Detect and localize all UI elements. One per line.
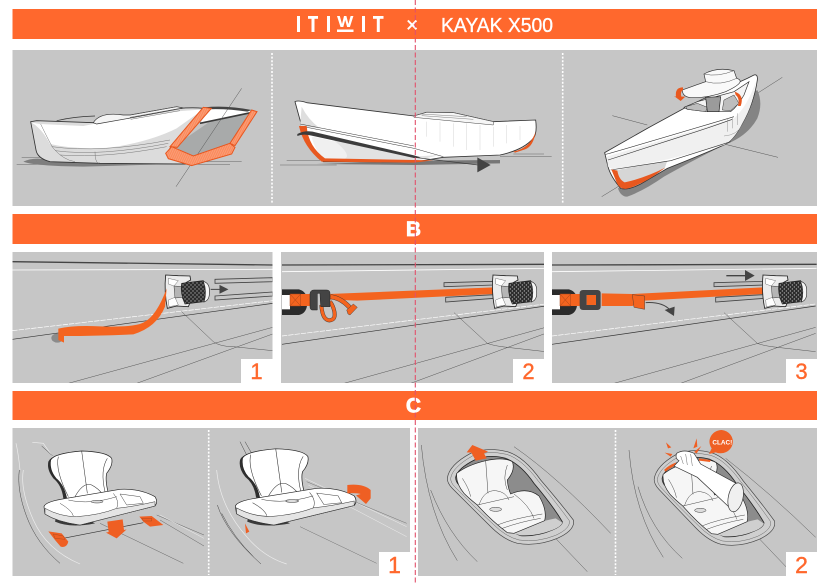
arrow up [467, 445, 488, 461]
seat installed with rotate arrow [217, 442, 407, 564]
step number 1: 1 [250, 359, 263, 384]
arrow [211, 286, 227, 293]
rotation arrows [674, 87, 685, 101]
band C [12, 391, 817, 420]
step number 1 [379, 552, 410, 578]
kayak with orange hatch frame [17, 88, 257, 187]
strap tail [331, 297, 351, 309]
arrow down [106, 519, 127, 538]
impact marks [665, 438, 701, 457]
strap loop [321, 302, 335, 320]
panel: C step 2 [418, 428, 817, 578]
header band [12, 9, 817, 39]
kayak with strap and arrow [280, 101, 552, 172]
panel: B step 1 [12, 252, 273, 384]
title: KAYAK X500: KAYAK X500 [441, 14, 553, 37]
kayak seen from front with rotation arrows [602, 69, 782, 197]
rails [215, 278, 273, 300]
logo: ITIWIT [297, 16, 384, 32]
step number 3: 3 [795, 359, 808, 384]
forearm and hand [674, 451, 742, 512]
rotate arrow [347, 485, 371, 504]
seat with clips [16, 442, 204, 564]
letter C: C [406, 394, 421, 418]
letter B: B [406, 218, 421, 241]
speech bubble: CLAC! [709, 430, 733, 454]
speech bubble: CLAC!: CLAC! [712, 440, 732, 446]
step number 3 [786, 359, 817, 384]
step number 2: 2 [522, 359, 535, 384]
panel: B step 3 [552, 252, 817, 384]
step number 2 [786, 552, 817, 578]
step number 2 [513, 359, 544, 384]
step number 1: 1 [388, 552, 401, 578]
panel: section A [12, 50, 817, 206]
panel: C step 1 [12, 428, 410, 578]
cockpit with seat and arrow [421, 445, 611, 572]
step number 1 [241, 359, 272, 384]
multiplication sign: × [406, 14, 418, 37]
panel: B step 2 [281, 252, 547, 384]
cockpit with hand pressing [629, 430, 816, 572]
strap [58, 288, 167, 343]
band B [12, 214, 817, 244]
step number 2: 2 [795, 552, 808, 578]
